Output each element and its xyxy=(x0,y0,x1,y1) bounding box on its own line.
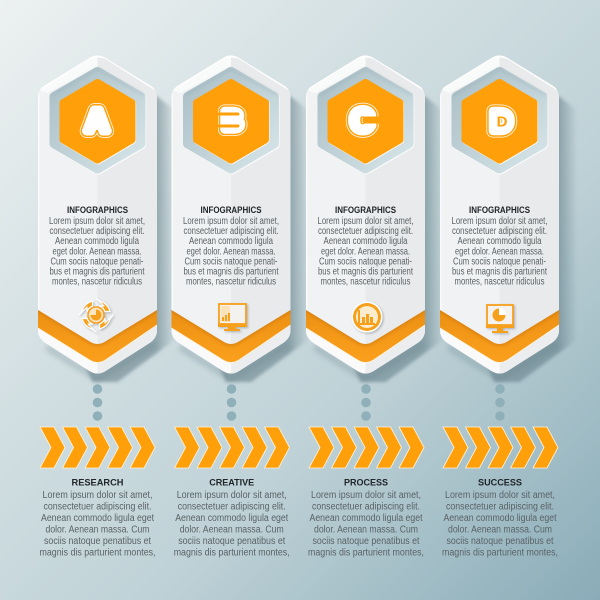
panel: card C xyxy=(304,50,442,382)
text block C: Cum sociis natoque penati- xyxy=(319,256,412,268)
letter D: D xyxy=(497,114,508,130)
text block D: INFOGRAPHICS xyxy=(469,205,530,216)
text block: creative: magnis dis parturient montes, xyxy=(174,548,290,558)
text block B: consectetuer adipiscing elit. xyxy=(184,226,278,237)
text block: success: magnis dis parturient montes, xyxy=(442,548,558,558)
text block: process: sociis natoque penatibus et xyxy=(312,536,420,547)
text block: process: consectetuer adipiscing elit. xyxy=(312,502,420,512)
text block B: bus et magnis dis parturient xyxy=(184,266,279,278)
text block A xyxy=(49,205,145,288)
icon: cycle arrows xyxy=(79,298,113,332)
letter A: A xyxy=(86,103,108,138)
text block: research: consectetuer adipiscing elit. xyxy=(44,502,152,512)
text block: research xyxy=(40,478,156,558)
letter C xyxy=(350,102,388,138)
letter B: B xyxy=(223,106,242,136)
text block: creative: Aenean commodo ligula eget xyxy=(175,513,288,524)
letter B: B xyxy=(223,106,242,136)
dots connector B xyxy=(227,384,236,421)
text block C: eget dolor. Aenean massa. xyxy=(321,246,410,258)
text block D: eget dolor. Aenean massa. xyxy=(455,246,544,258)
letter A: A xyxy=(86,103,108,138)
text block A: eget dolor. Aenean massa. xyxy=(52,246,142,258)
text block C: Aenean commodo ligula xyxy=(324,236,408,247)
arrow: chevrons D xyxy=(443,427,558,468)
text block: research: RESEARCH xyxy=(72,478,124,488)
text block D: Lorem ipsum dolor sit amet, xyxy=(452,216,548,227)
text block C: consectetuer adipiscing elit. xyxy=(318,226,413,237)
text block: process xyxy=(308,478,424,558)
text block B: montes, nascetur ridiculus xyxy=(186,276,276,288)
text block A: Aenean commodo ligula xyxy=(55,236,139,247)
letter C: C xyxy=(350,102,374,138)
panel: card B xyxy=(169,50,308,382)
text block C xyxy=(318,205,414,288)
text block: process: Aenean commodo ligula eget xyxy=(310,513,423,524)
text block: research: Lorem ipsum dolor sit amet, xyxy=(42,490,152,501)
text block C: bus et magnis dis parturient xyxy=(318,266,413,278)
icon: round chart badge xyxy=(352,302,382,332)
text block B: Cum sociis natoque penati- xyxy=(184,256,278,268)
text block: success: Aenean commodo ligula eget xyxy=(444,513,557,524)
text block A: consectetuer adipiscing elit. xyxy=(50,226,144,237)
text block: creative: consectetuer adipiscing elit. xyxy=(178,502,286,512)
text block: research: magnis dis parturient montes, xyxy=(40,548,156,558)
text block B: Aenean commodo ligula xyxy=(189,236,273,247)
text block B: INFOGRAPHICS xyxy=(200,205,262,216)
text block: success: SUCCESS xyxy=(478,478,522,488)
arrow: chevrons A xyxy=(40,427,155,468)
letter A: A xyxy=(86,103,108,138)
text block A: Cum sociis natoque penati- xyxy=(50,256,144,268)
panel: card A xyxy=(36,50,174,382)
text block A: bus et magnis dis parturient xyxy=(50,266,145,278)
text block: success: dolor. Aenean massa. Cum xyxy=(448,524,552,536)
text block A: Lorem ipsum dolor sit amet, xyxy=(49,216,145,227)
icon: monitor with bars xyxy=(218,304,247,331)
text block: creative: sociis natoque penatibus et xyxy=(178,536,285,547)
text block: process: dolor. Aenean massa. Cum xyxy=(314,524,418,536)
text block B xyxy=(183,205,279,288)
text block: success: consectetuer adipiscing elit. xyxy=(446,502,554,512)
arrow: chevrons C xyxy=(309,427,424,468)
letter D: D xyxy=(491,106,512,138)
letter D: D xyxy=(491,106,512,138)
letter C: C xyxy=(350,102,374,138)
text block D: Aenean commodo ligula xyxy=(458,236,542,247)
text block D: Cum sociis natoque penati- xyxy=(453,256,546,268)
text block: process: Lorem ipsum dolor sit amet, xyxy=(311,490,421,501)
text block D: montes, nascetur ridiculus xyxy=(454,276,544,288)
panel: card D xyxy=(438,50,576,382)
dots connector C xyxy=(361,384,371,421)
dots connector D xyxy=(495,384,505,421)
letter B: B xyxy=(223,106,242,136)
text block: success: sociis natoque penatibus et xyxy=(446,536,554,547)
text block D xyxy=(452,205,548,288)
text block C: Lorem ipsum dolor sit amet, xyxy=(318,216,414,227)
text block: research: sociis natoque penatibus et xyxy=(44,536,151,547)
text block B: Lorem ipsum dolor sit amet, xyxy=(183,216,279,227)
dots connector A xyxy=(93,384,102,421)
text block: success: Lorem ipsum dolor sit amet, xyxy=(445,490,555,501)
text block: success xyxy=(442,478,558,558)
text block: research: dolor. Aenean massa. Cum xyxy=(46,524,150,536)
letter D: D xyxy=(491,106,512,138)
text block: creative: Lorem ipsum dolor sit amet, xyxy=(177,490,287,501)
text block: creative xyxy=(174,478,290,558)
letter C: C xyxy=(350,102,374,138)
text block A: INFOGRAPHICS xyxy=(67,205,128,216)
text block D: consectetuer adipiscing elit. xyxy=(452,226,547,237)
text block: creative: dolor. Aenean massa. Cum xyxy=(180,524,284,536)
icon: monitor with pie chart xyxy=(486,305,514,333)
text block C: montes, nascetur ridiculus xyxy=(320,276,410,288)
text block B: eget dolor. Aenean massa. xyxy=(186,246,276,258)
text block: process: PROCESS xyxy=(344,478,388,488)
arrow: chevrons B xyxy=(174,427,290,468)
text block C: INFOGRAPHICS xyxy=(335,205,396,216)
text block: process: magnis dis parturient montes, xyxy=(308,548,424,558)
text block: creative: CREATIVE xyxy=(209,478,254,488)
text block A: montes, nascetur ridiculus xyxy=(52,276,142,288)
text block: research: Aenean commodo ligula eget xyxy=(41,513,154,524)
text block D: bus et magnis dis parturient xyxy=(452,266,547,278)
